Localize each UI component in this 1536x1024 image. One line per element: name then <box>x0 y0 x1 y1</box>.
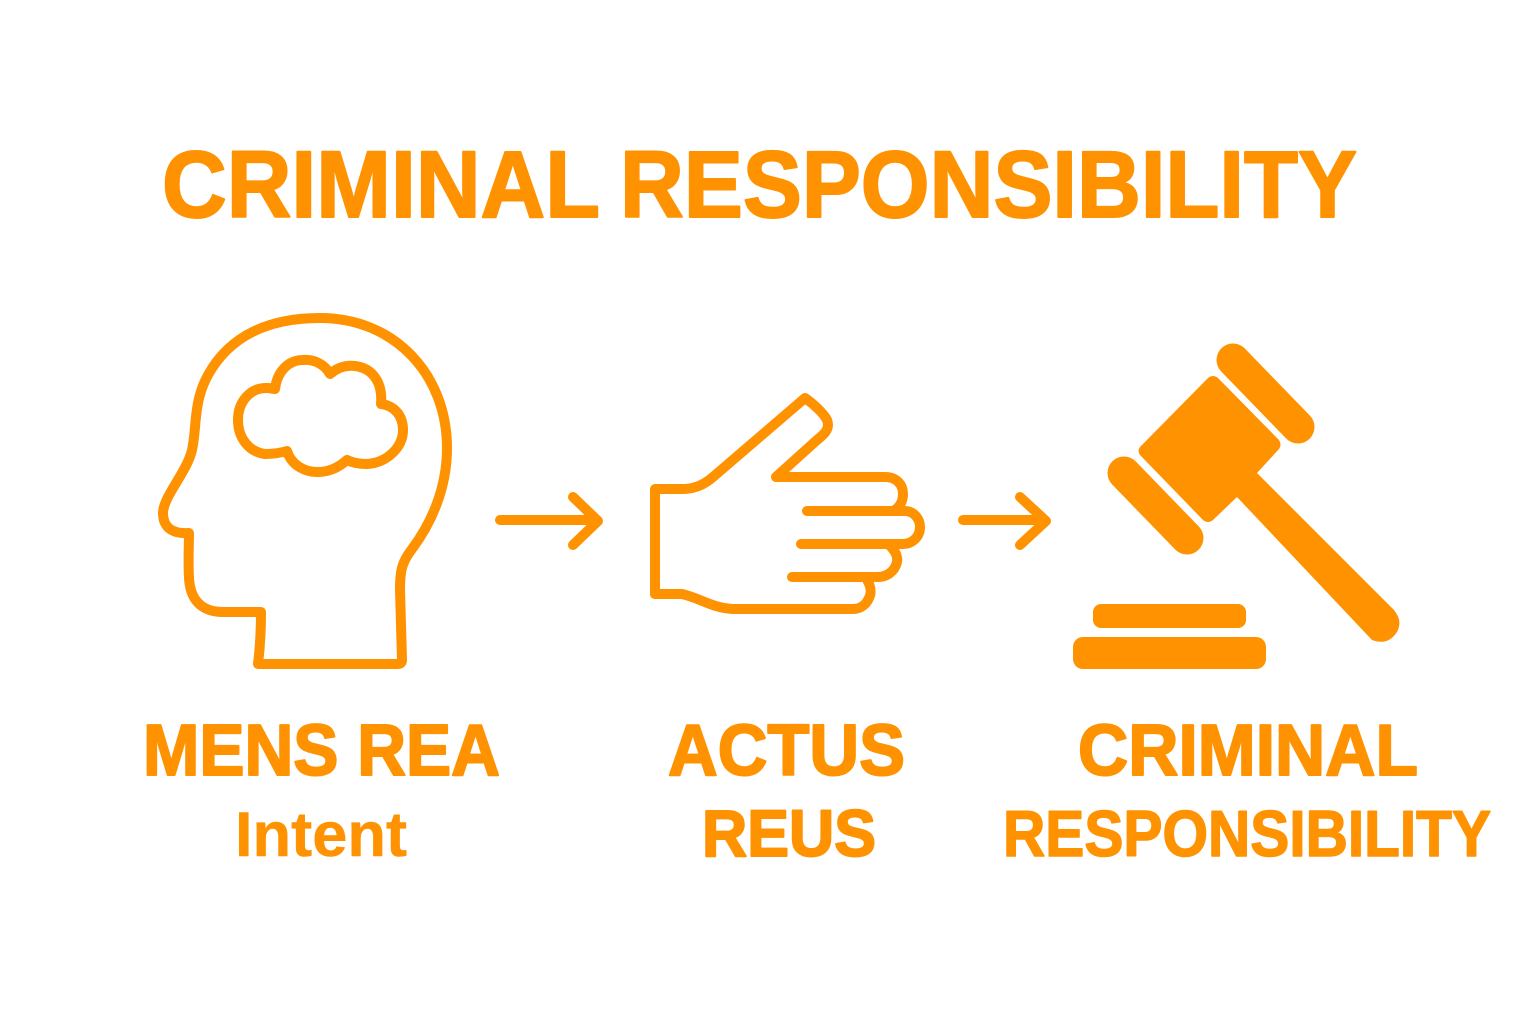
gavel head and handle <box>1138 376 1399 642</box>
brain cloud <box>238 360 403 472</box>
label: responsibility: RESPONSIBILITY <box>1003 797 1491 870</box>
icon: gavel <box>1073 360 1399 669</box>
title: CRIMINAL <box>162 132 600 238</box>
icon: head with brain <box>163 318 447 664</box>
arrow: act to responsibility <box>963 497 1046 545</box>
label: mens rea: MENS REA <box>143 711 500 791</box>
label: criminal: CRIMINAL <box>1078 711 1418 791</box>
bottom bar <box>1124 473 1187 538</box>
icon: hand <box>655 398 920 609</box>
base bottom <box>1073 637 1266 669</box>
base top <box>1093 604 1246 628</box>
title <box>162 132 1357 238</box>
finger dividers <box>801 511 920 544</box>
label: reus: REUS <box>702 796 876 870</box>
label: intent: Intent <box>235 800 407 870</box>
label: actus: ACTUS <box>668 711 905 791</box>
head outline <box>163 318 447 664</box>
arrow: intent to act <box>500 497 598 545</box>
top bar <box>1233 360 1298 427</box>
title: RESPONSIBILITY <box>620 132 1357 238</box>
hand outline with thumb and fingers <box>655 398 903 594</box>
